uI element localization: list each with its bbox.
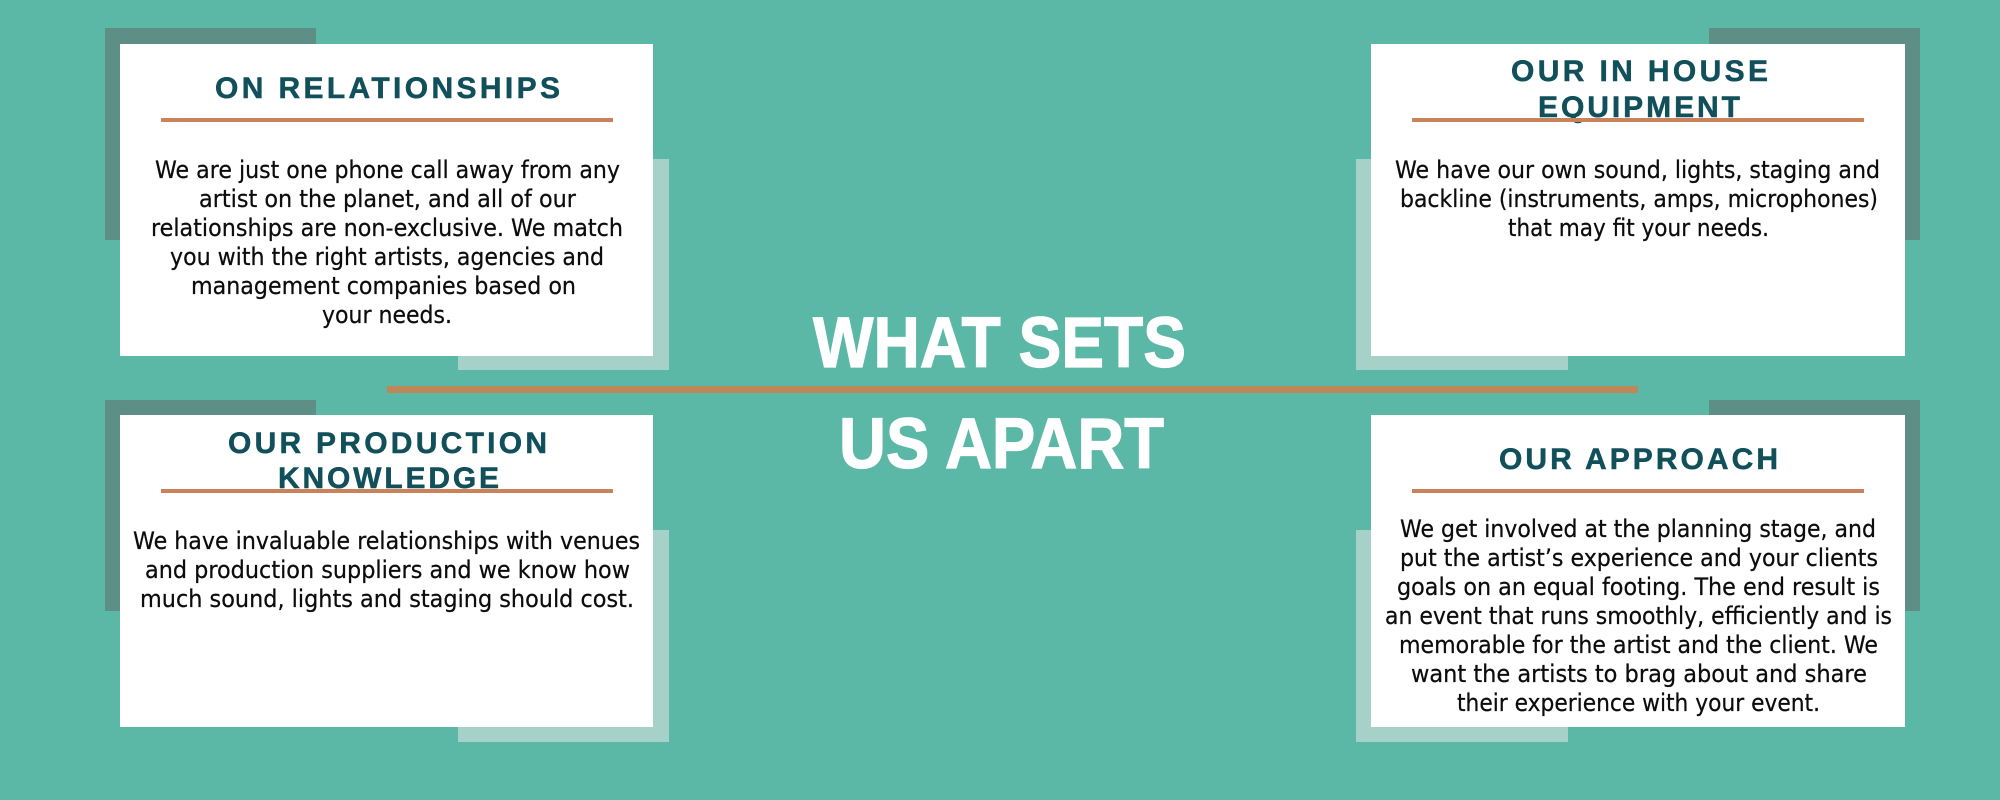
text: our in house equipment body: backline (instruments, amps, microphones) [1400,185,1878,213]
title: what sets us apart [813,304,1186,484]
heading: our production knowledge: KNOWLEDGE [278,462,499,495]
text: on relationships body: your needs. [322,301,452,329]
text: on relationships body [151,156,623,329]
text: our approach body: put the artist’s experience and your clients [1400,544,1878,572]
heading: our in house equipment: EQUIPMENT [1538,91,1740,124]
heading: our in house equipment: OUR IN HOUSE [1511,55,1768,88]
text: on relationships body: relationships are non-exclusive. We match [151,214,623,242]
text: our production knowledge body: much sound, lights and staging should cost. [140,585,634,613]
text: on relationships body: artist on the planet, and all of our [199,185,576,213]
title: what sets us apart: US APART [839,405,1164,484]
text: our in house equipment body: that may fit your needs. [1508,214,1769,242]
heading: our production knowledge [228,427,547,495]
text: our in house equipment body [1395,156,1880,242]
text: our production knowledge body: We have invaluable relationships with venues [133,527,640,555]
text: our production knowledge body: and production suppliers and we know how [145,556,630,584]
heading: our approach: OUR APPROACH [1499,443,1778,476]
panel: our in house equipment [1356,28,1920,370]
panel: on relationships [105,28,669,370]
text: our approach body: want the artists to brag about and share [1411,660,1867,688]
text: our approach body: an event that runs smoothly, efficiently and is [1385,602,1892,630]
text: on relationships body: We are just one phone call away from any [155,156,620,184]
text: on relationships body: you with the right artists, agencies and [170,243,604,271]
divider: central title rule [387,386,1638,393]
panel: our production knowledge [105,400,669,742]
text: our approach body: We get involved at the planning stage, and [1400,515,1876,543]
text: on relationships body: management companies based on [191,272,576,300]
text: our approach body: their experience with your event. [1457,689,1820,717]
text: our in house equipment body: We have our own sound, lights, staging and [1395,156,1880,184]
heading: our in house equipment [1511,55,1768,124]
text: our approach body: memorable for the artist and the client. We [1399,631,1878,659]
title: what sets us apart: WHAT SETS [813,304,1186,383]
heading: on relationships: ON RELATIONSHIPS [215,72,560,105]
panel: our approach [1356,400,1920,742]
text: our approach body [1385,515,1892,717]
text: our approach body: goals on an equal footing. The end result is [1397,573,1880,601]
heading: our production knowledge: OUR PRODUCTION [228,427,547,460]
text: our production knowledge body [133,527,640,613]
